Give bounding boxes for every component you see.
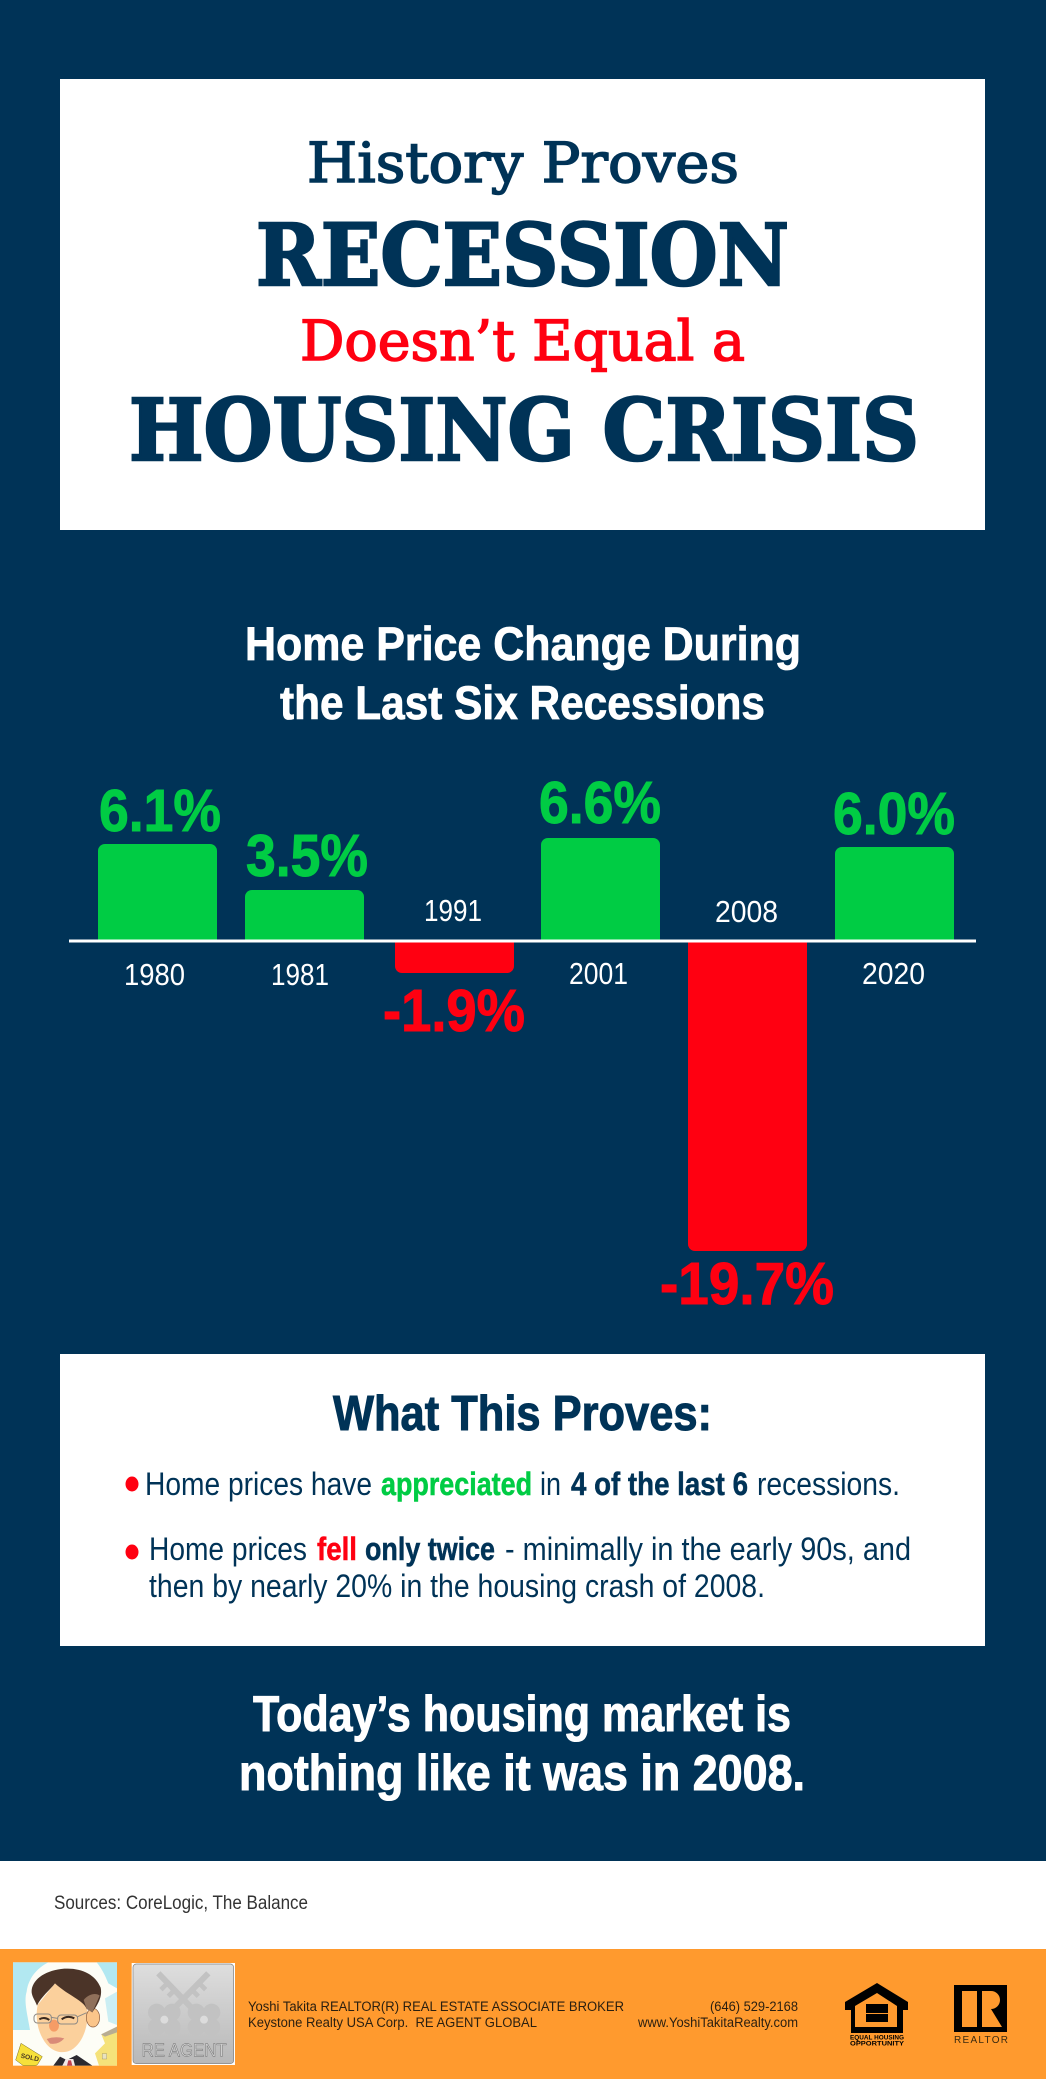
bar: 2001 <box>539 770 661 991</box>
bar: 1991: 1991 <box>424 893 482 928</box>
title line: RECESSION: RECESSION <box>256 206 789 306</box>
left key bow <box>148 2004 181 2036</box>
key shafts and teeth <box>158 1973 208 2018</box>
bar: 2020 <box>833 781 955 991</box>
sources strip: Sources: CoreLogic, The Balance <box>54 1893 308 1914</box>
bar: 1980 <box>98 778 221 992</box>
panel heading: What This Proves: <box>333 1387 712 1441</box>
bullet point: fell only twice: only twice <box>365 1531 495 1567</box>
bar: 1981: 1981 <box>271 957 329 992</box>
bar: 2020: 6.0% <box>833 781 955 847</box>
bullet point: appreciated <box>126 1466 900 1502</box>
right key bow <box>188 2004 220 2036</box>
icon: realtor logo <box>954 1985 1008 2046</box>
bullet point: appreciated: Home prices have <box>145 1466 372 1502</box>
chart heading: Home Price Change During <box>245 617 801 670</box>
mouth <box>47 2037 64 2044</box>
bar: 1991 <box>383 893 525 1044</box>
bullet point: appreciated: 4 of the last 6 <box>571 1466 748 1502</box>
sources strip <box>0 1861 1046 1949</box>
bullet point: fell only twice: then by nearly 20% in the housing crash of 2008. <box>149 1568 765 1604</box>
agent name and company: Keystone Realty USA Corp. RE AGENT GLOBAL <box>248 2015 537 2030</box>
icon: agent caricature portrait: SOLD <box>20 2053 40 2063</box>
badge wordmark: RE AGENT <box>142 2040 227 2061</box>
bullet point: appreciated: in <box>540 1466 561 1502</box>
bullet point: fell only twice: - minimally in the early 90s, and <box>505 1531 911 1567</box>
agent name and company: Yoshi Takita REALTOR(R) REAL ESTATE ASSOCIATE BROKER <box>248 1999 624 2014</box>
title line: History Proves: History Proves <box>307 131 739 195</box>
agent name and company <box>248 1999 624 2030</box>
agent phone and website: www.YoshiTakitaRealty.com <box>637 2015 798 2030</box>
icon: RE Agent crossed keys badge <box>132 1963 235 2065</box>
bar: 1981 <box>245 823 368 992</box>
bar: 2008 <box>660 894 834 1317</box>
bullet point: fell only twice <box>126 1531 911 1604</box>
panel: what this proves <box>60 1354 985 1646</box>
icon: equal housing opportunity <box>845 1983 908 2048</box>
bar: 1980: 1980 <box>124 957 185 992</box>
bullet point: fell only twice: Home prices <box>149 1531 307 1567</box>
glasses <box>34 2014 51 2023</box>
bar: 1991: -1.9% <box>383 978 525 1044</box>
icon: equal housing opportunity: EQUAL HOUSING <box>850 2034 904 2042</box>
closing statement: Today’s housing market is <box>253 1686 791 1742</box>
icon: agent caricature portrait <box>13 1962 117 2066</box>
bar: 2020: 2020 <box>862 956 925 991</box>
agent phone and website: (646) 529-2168 <box>710 1999 798 2014</box>
bar: 2008: -19.7% <box>660 1251 834 1317</box>
chart heading: the Last Six Recessions <box>280 676 765 729</box>
bullet point: appreciated: recessions. <box>757 1466 900 1502</box>
bar: 2008: 2008 <box>715 894 778 929</box>
shirt and jacket <box>53 2055 92 2066</box>
closing statement <box>239 1686 805 1801</box>
bullet point: fell only twice: fell <box>317 1531 357 1567</box>
bar: 2001: 2001 <box>569 956 628 991</box>
bullet point: appreciated: appreciated <box>381 1466 532 1502</box>
panel: title <box>60 79 985 530</box>
bar: 1981: 3.5% <box>246 823 368 889</box>
hair <box>32 1969 101 2012</box>
yellow sign <box>16 2043 42 2066</box>
icon: realtor logo: REALTOR <box>954 2035 1008 2046</box>
bar chart: home price change <box>69 770 976 1317</box>
title line: HOUSING CRISIS: HOUSING CRISIS <box>129 381 919 481</box>
title line: Doesn't Equal a: Doesn’t Equal a <box>300 309 745 373</box>
house <box>95 2027 117 2066</box>
icon: equal housing opportunity: OPPORTUNITY <box>850 2040 905 2048</box>
footer: agent contact bar <box>0 1949 1046 2079</box>
bar: 2001: 6.6% <box>539 770 661 836</box>
bar: 1980: 6.1% <box>99 778 221 844</box>
face <box>37 1983 88 2052</box>
closing statement: nothing like it was in 2008. <box>239 1745 805 1801</box>
agent phone and website <box>637 1999 798 2030</box>
chart heading <box>245 617 801 729</box>
